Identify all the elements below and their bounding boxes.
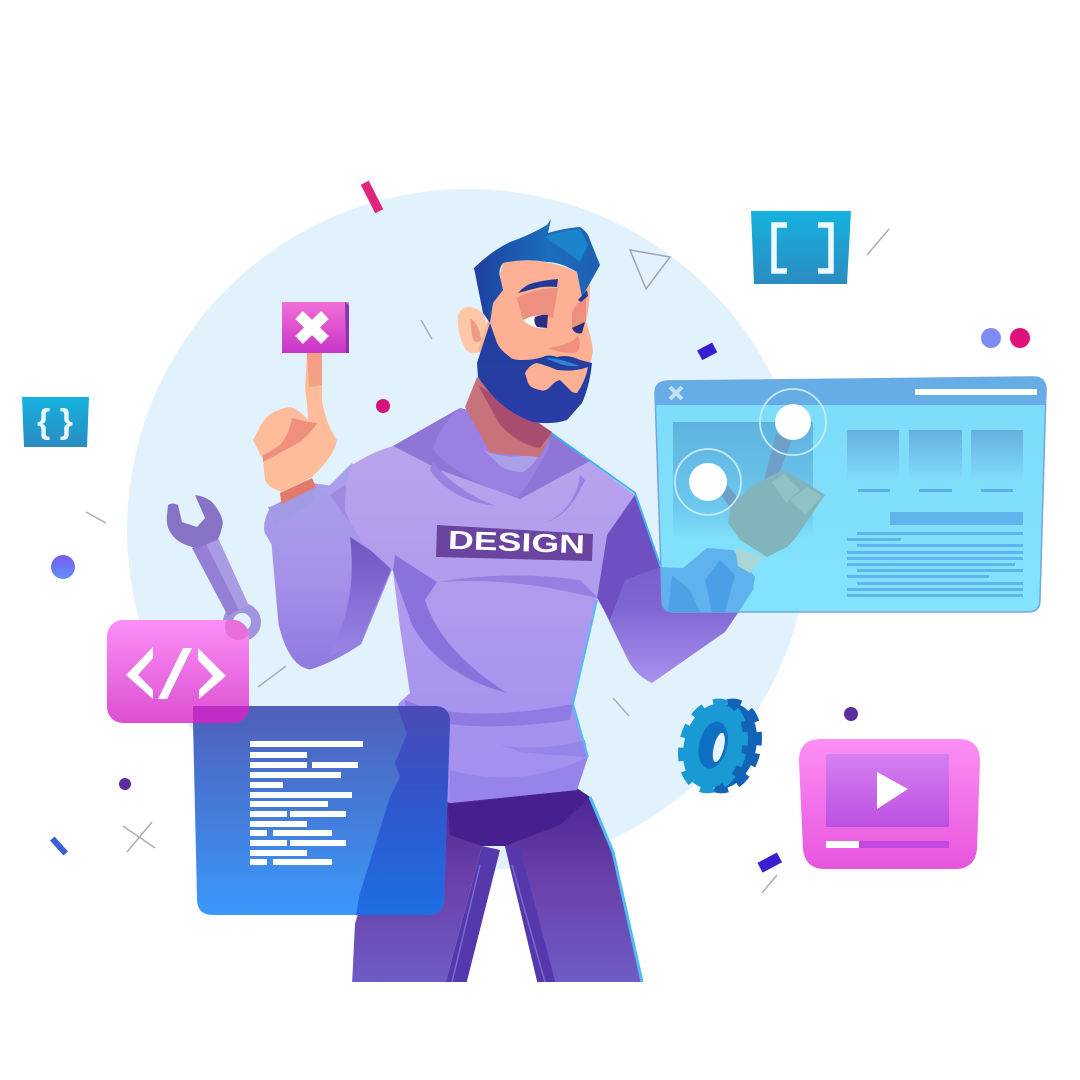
- thumbnail grid: [847, 430, 1023, 492]
- video screen: [826, 754, 949, 827]
- illustration: designer with floating interface panels: [22, 180, 1047, 982]
- eye shading: [517, 288, 558, 320]
- panel: browser window: [650, 375, 1050, 625]
- pink X sign: [282, 302, 349, 353]
- moustache highlight: [545, 358, 580, 366]
- decorative accents: bars, dots and lines: [50, 181, 1030, 893]
- face: [478, 260, 593, 362]
- icon: square bracket card: [751, 211, 851, 284]
- eyes and brows: [518, 279, 588, 333]
- icon: code tag: [126, 647, 226, 699]
- nose: [548, 335, 580, 353]
- icon: wrench: [167, 495, 256, 636]
- icon: play: [877, 772, 908, 809]
- touch point rings: [675, 389, 826, 515]
- beard: [477, 323, 592, 423]
- chest label: DESIGN: DESIGN: [448, 525, 586, 559]
- background circle: [127, 189, 809, 871]
- text block: [847, 512, 1023, 597]
- icon: curly brace card: [22, 397, 89, 447]
- chest label: DESIGN: [436, 525, 593, 561]
- chin patch: [525, 363, 588, 393]
- picture placeholder: [673, 422, 813, 537]
- overlap with code window: [193, 706, 249, 723]
- panel: code window: [193, 700, 460, 920]
- window close icon: [670, 387, 682, 399]
- progress bar: [826, 841, 949, 848]
- ear: [458, 307, 487, 353]
- raised hand: [253, 353, 337, 525]
- hair: [474, 219, 600, 323]
- address bar: [915, 389, 1037, 395]
- panel: video player: [799, 739, 980, 869]
- shoulder seam fold: [330, 485, 372, 552]
- neck: [465, 377, 552, 457]
- panel: pink code tag card: [107, 620, 249, 723]
- code lines: [250, 741, 363, 865]
- icon: curly brace card: { }: [37, 403, 73, 441]
- window title bar: [650, 375, 1050, 405]
- figure: designer: [253, 219, 760, 985]
- body seen through code window: [356, 706, 450, 915]
- wrench ring through card: [225, 620, 249, 640]
- left sleeve: [266, 465, 395, 668]
- touching hand behind glass: [716, 434, 825, 573]
- sleeve shadow: [340, 537, 391, 631]
- arm behind glass: [661, 548, 755, 612]
- icon: gear: [674, 697, 766, 795]
- trousers: [352, 788, 642, 985]
- right sleeve: [602, 496, 738, 683]
- sweater torso: [345, 408, 660, 803]
